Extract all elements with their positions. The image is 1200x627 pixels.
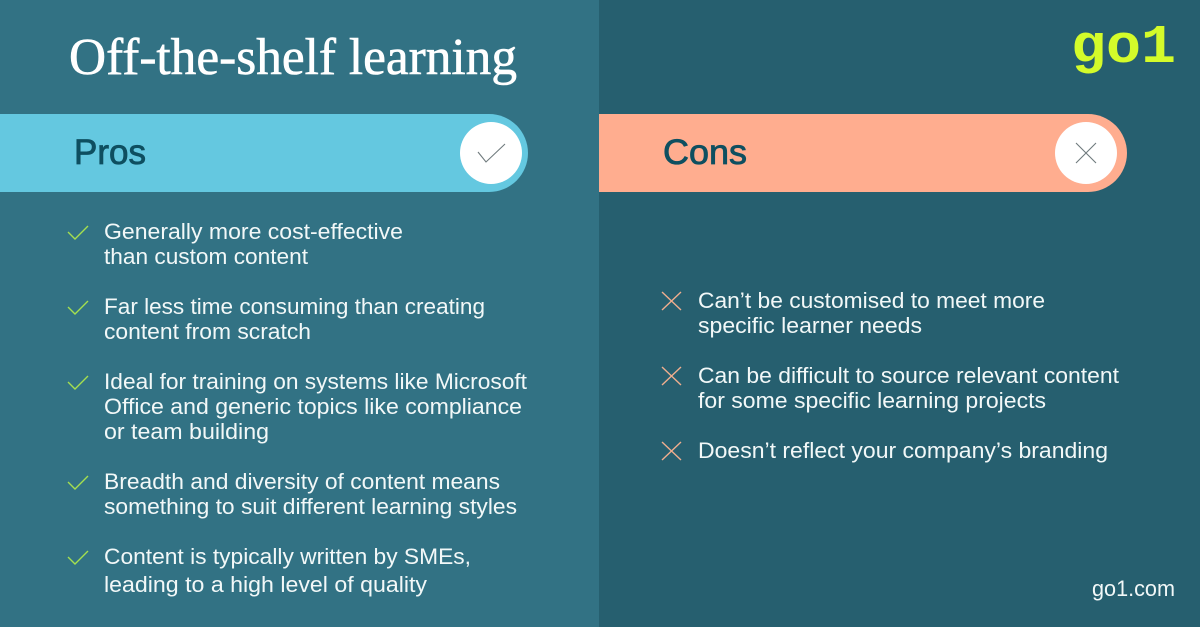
panel: left background	[0, 0, 599, 627]
pro item 4	[68, 469, 517, 519]
icon: cross in circle	[1055, 122, 1117, 184]
list: cons	[662, 288, 1120, 463]
heading: pros: Pros	[74, 133, 146, 172]
pro item 1: than custom content	[104, 244, 309, 269]
pro item 4: Breadth and diversity of content means	[104, 469, 500, 494]
footer url: go1.com	[1092, 576, 1175, 601]
pro item 3	[68, 369, 528, 444]
pro item 2	[68, 294, 485, 344]
pro item 5: Content is typically written by SMEs,	[104, 544, 471, 569]
heading: cons: Cons	[663, 133, 747, 172]
pro item 5	[68, 544, 471, 597]
pro item 3: Office and generic topics like compliance	[104, 394, 522, 419]
pro item 2: Far less time consuming than creating	[104, 294, 485, 319]
title: Off-the-shelf learning	[69, 29, 517, 86]
pro item 1: Generally more cost-effective	[104, 219, 403, 244]
con item 1: Can’t be customised to meet more	[698, 288, 1045, 313]
con item 2	[662, 363, 1120, 413]
con item 3: Doesn’t reflect your company’s branding	[698, 438, 1108, 463]
pro item 3: or team building	[104, 419, 269, 444]
panel: pros header	[0, 114, 528, 192]
pro item 5: leading to a high level of quality	[104, 572, 428, 597]
con item 2: Can be difficult to source relevant content	[698, 363, 1120, 388]
panel: right background	[599, 0, 1200, 627]
con item 1: specific learner needs	[698, 313, 922, 338]
panel: cons header	[599, 114, 1127, 192]
con item 2: for some specific learning projects	[698, 388, 1046, 413]
list: pros	[68, 219, 528, 597]
icon: check in circle	[460, 122, 522, 184]
pro item 2: content from scratch	[104, 319, 311, 344]
con item 1	[662, 288, 1045, 338]
pro item 4: something to suit different learning styles	[104, 494, 517, 519]
pro item 1	[68, 219, 403, 269]
logo: go1: go1	[1071, 16, 1176, 79]
pro item 3: Ideal for training on systems like Microsoft	[104, 369, 528, 394]
